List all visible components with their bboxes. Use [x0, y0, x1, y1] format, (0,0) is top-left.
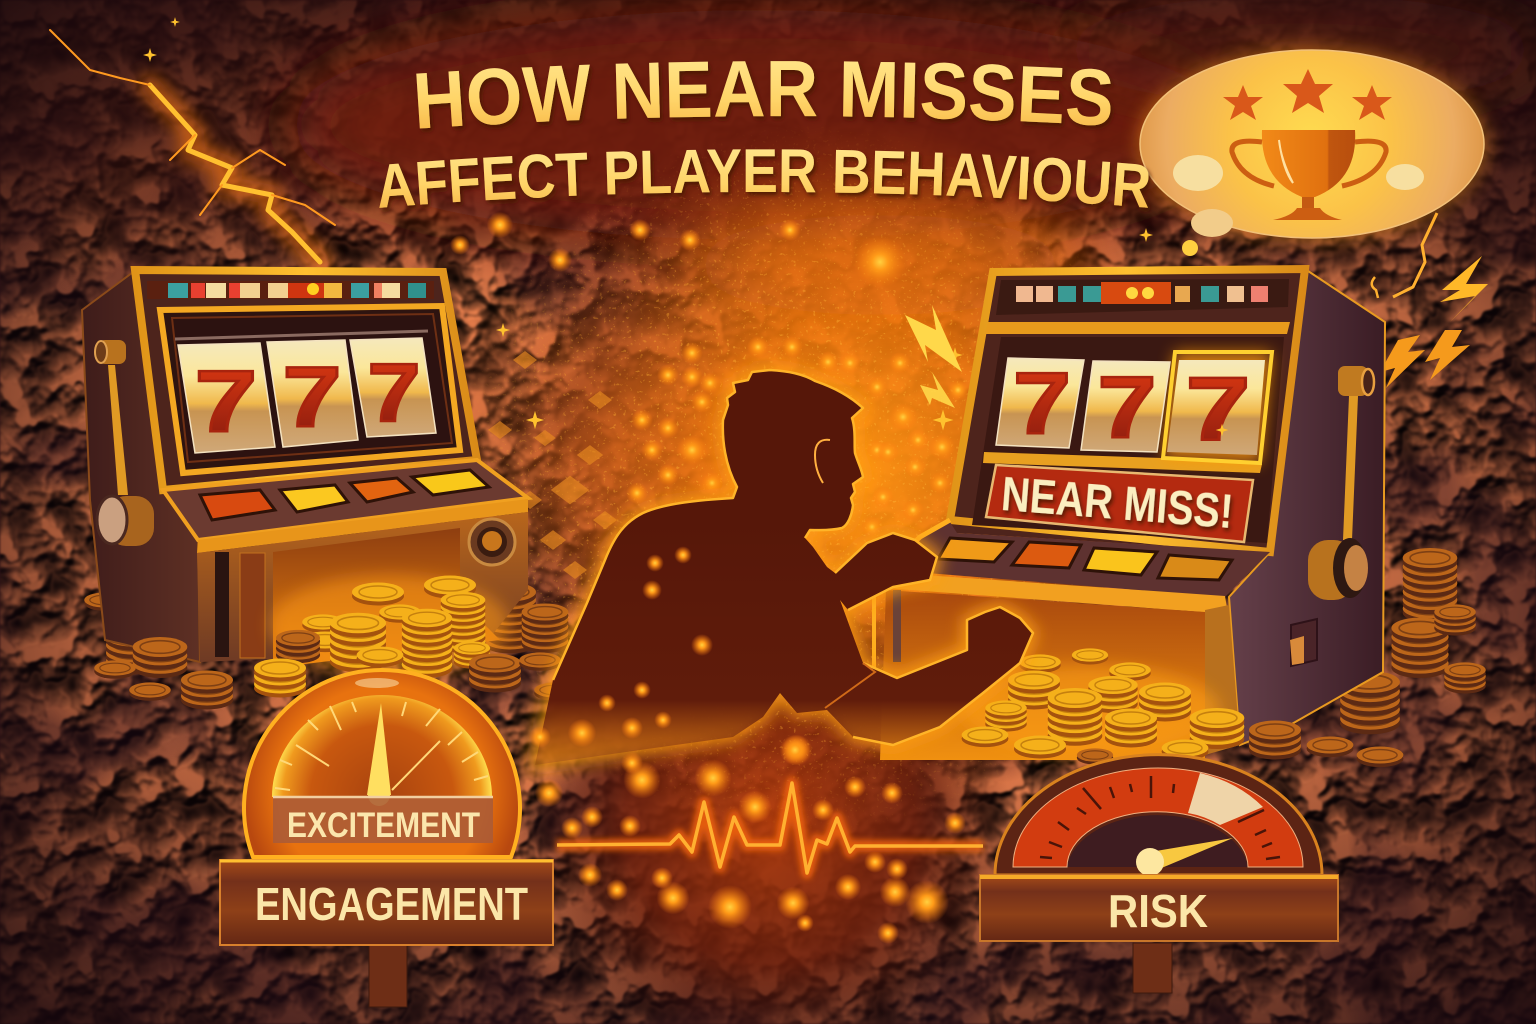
glowing motes behind scene	[450, 212, 969, 584]
console with buttons	[163, 460, 528, 553]
near miss banner: NEAR MISS!	[999, 468, 1235, 539]
machine head	[135, 270, 477, 490]
reels and sevens: 7	[195, 353, 257, 450]
trophy	[1232, 130, 1386, 220]
heartbeat line	[557, 783, 983, 873]
side slot	[1290, 619, 1317, 666]
engagement sign post	[369, 945, 407, 1007]
slot machine: left	[82, 270, 528, 668]
thought bubble with trophy	[1136, 46, 1488, 256]
coins: back piles	[84, 548, 1486, 734]
reels and sevens: 7	[282, 350, 342, 445]
coin-return knob	[469, 519, 515, 565]
reels and sevens	[996, 352, 1272, 463]
lightning: top left	[50, 17, 335, 262]
left pile	[94, 575, 576, 710]
title: AFFECT PLAYER BEHAVIOUR	[379, 149, 1154, 212]
heartbeat glow motes	[535, 735, 966, 944]
small bolts by right machine	[905, 305, 962, 408]
reels and sevens	[178, 338, 436, 453]
small clouds in bubble	[1173, 155, 1424, 191]
machine side panel	[82, 270, 200, 662]
stars	[1223, 69, 1392, 120]
bubble tail	[1139, 209, 1233, 256]
console with buttons	[880, 520, 1270, 614]
needle	[1150, 838, 1233, 872]
machine head	[920, 269, 1305, 552]
lever	[95, 340, 154, 546]
reels and sevens: 7	[367, 346, 421, 439]
slot machine: right, near miss	[872, 269, 1385, 760]
screen frame	[160, 306, 460, 473]
risk sign: RISK	[1108, 885, 1208, 937]
gauge dome	[244, 670, 520, 857]
light strip	[147, 281, 434, 299]
red scale	[1013, 768, 1303, 867]
right pile	[960, 648, 1403, 767]
ear	[815, 440, 830, 483]
coins: front piles	[94, 575, 1403, 767]
machine side panel	[1229, 269, 1385, 745]
light strip	[996, 279, 1289, 315]
cream zone	[1188, 773, 1263, 825]
gauge: risk	[980, 755, 1338, 993]
tick marks	[1040, 776, 1280, 859]
gauge: excitement / engagement	[220, 670, 553, 1007]
machine base	[880, 590, 1205, 760]
needle	[367, 703, 391, 795]
title	[379, 61, 1154, 212]
excitement band: EXCITEMENT	[287, 806, 480, 845]
machine base	[197, 512, 528, 662]
screen	[972, 337, 1284, 543]
player silhouette	[529, 370, 1033, 765]
reels and sevens: 7	[1013, 355, 1071, 452]
tick marks	[275, 702, 488, 790]
glow motes on body	[529, 546, 812, 765]
title: HOW NEAR MISSES	[416, 61, 1114, 133]
risk sign post	[1133, 943, 1172, 993]
glow around third reel	[1163, 352, 1272, 463]
gauge body	[995, 755, 1322, 875]
lightning: top right	[1372, 213, 1488, 388]
reels and sevens: 7	[1097, 358, 1157, 456]
rim light	[553, 370, 1033, 745]
sleeve edge	[825, 663, 875, 708]
reels and sevens: 7	[1185, 360, 1251, 460]
engagement sign: ENGAGEMENT	[255, 878, 528, 930]
dial face	[272, 695, 492, 797]
engagement sign	[220, 860, 553, 945]
risk sign	[980, 875, 1338, 941]
lever	[1308, 366, 1374, 600]
